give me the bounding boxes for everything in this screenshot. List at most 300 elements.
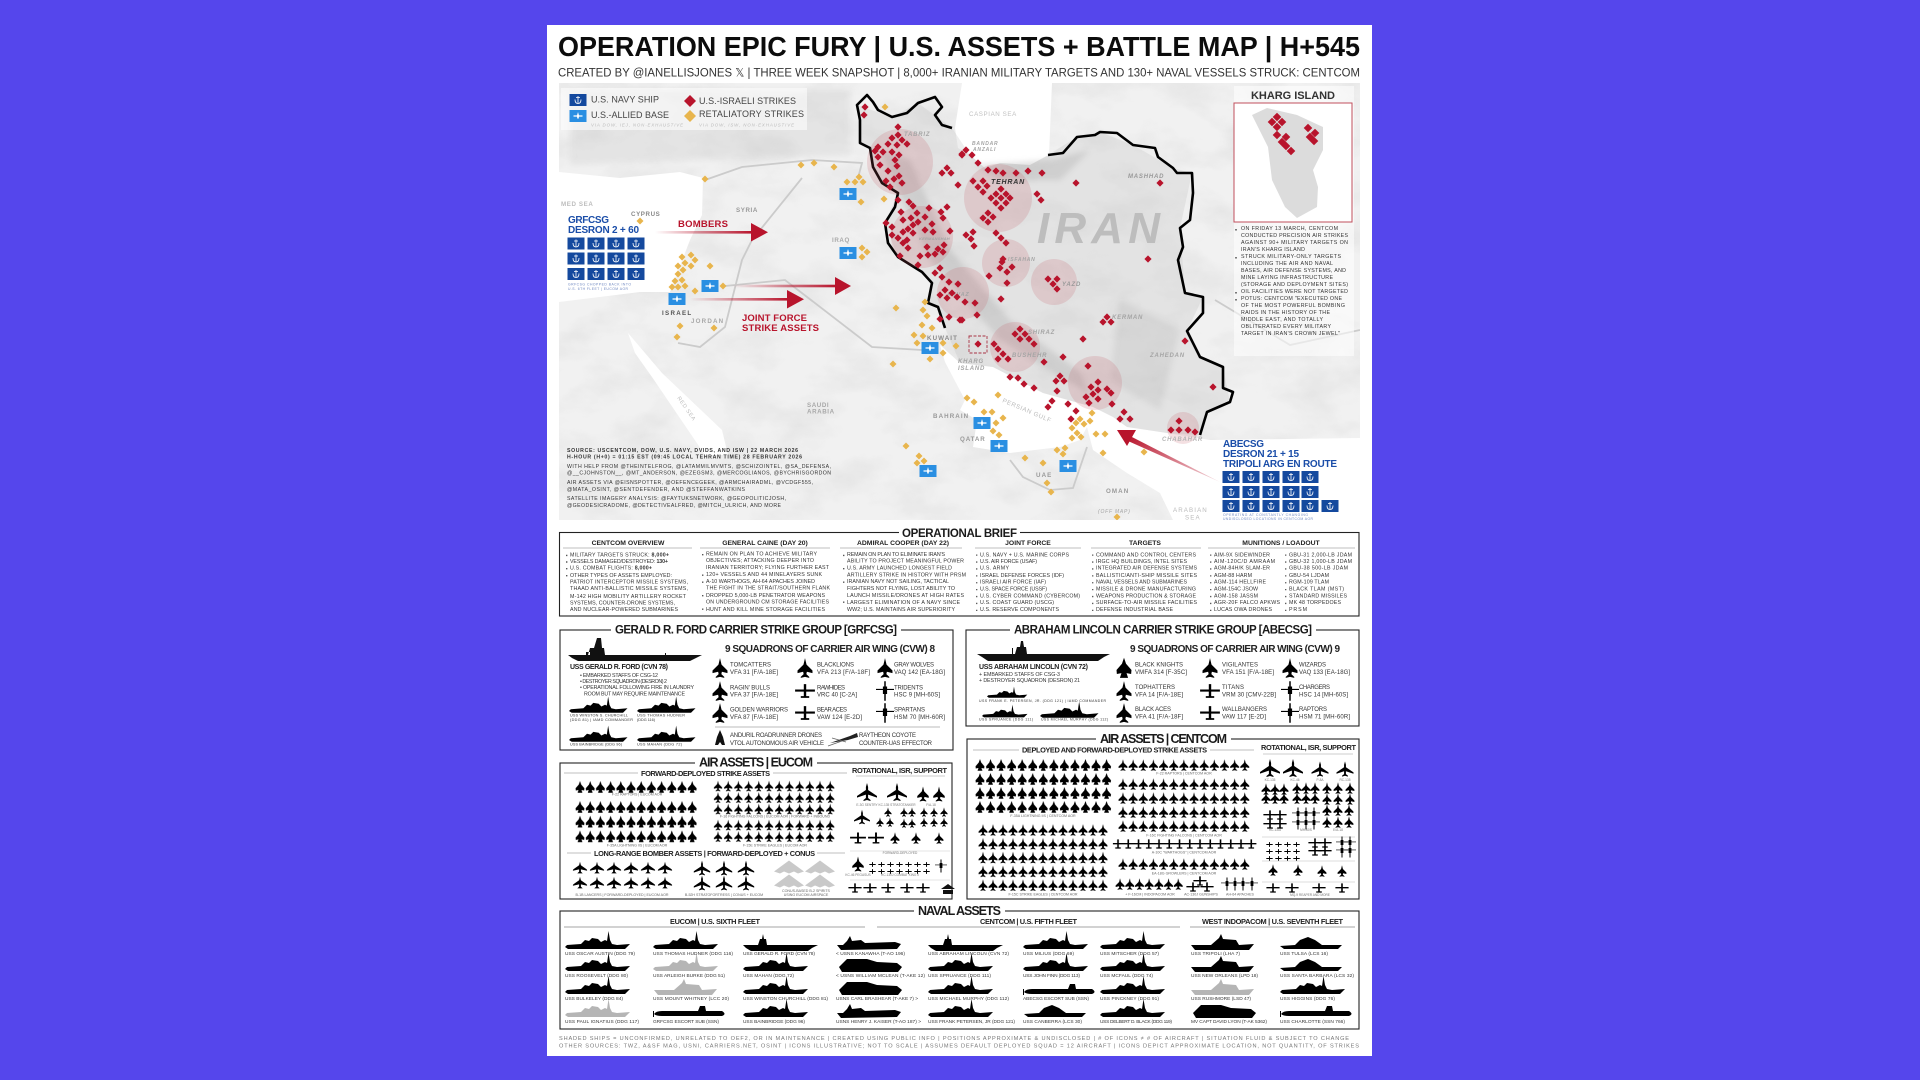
map place labels: TEHRAN (991, 179, 1025, 186)
ABECSG fleet marker: TRIPOLI ARG EN ROUTE (1223, 459, 1337, 470)
fleet: CENTCOM fifth fleet ships: ABECSG ESCORT SUB (SSN) (1023, 996, 1089, 1002)
rotational, ISR, support icons: HC-130J (1269, 828, 1282, 832)
map place labels: KERMAN (1112, 315, 1143, 321)
map place labels: ZAHEDAN (1149, 353, 1185, 359)
map place labels: BAHRAIN (933, 413, 969, 420)
squadrons of CVW-8: SPARTANS (894, 707, 925, 713)
legend: U.S. NAVY SHIP (591, 95, 659, 105)
fleet: West Indopacom seventh fleet ships: USS CHARLOTTE (SSN 766) (1280, 1019, 1345, 1025)
squadrons of CVW-9: VIGILANTES (1222, 663, 1258, 669)
Kharg strike notes: OF THE MOST POWERFUL BOMBING (1241, 303, 1345, 309)
brief: Admiral Cooper: IRANIAN NAVY NOT SAILING, TACTICAL (847, 579, 949, 585)
ABECSG fleet marker: DESRON 21 + 15 (1223, 449, 1299, 460)
brief: targets: WEAPONS PRODUCTION & STORAGE (1096, 593, 1196, 599)
icons: escort destroyers: (DDG 81) | IAMD COMMANDER (570, 718, 633, 722)
arrow: joint force strike assets (690, 277, 851, 334)
bomber icons: USING EUCOM AIRSPACE (784, 893, 829, 897)
ABECSG fleet marker (1222, 439, 1338, 521)
fleet: CENTCOM fifth fleet ships: USS DELBERT D. BLACK (DDG 119) (1100, 1019, 1172, 1025)
panel: naval assets (560, 904, 1359, 1029)
panel: air assets EUCOM: AIR ASSETS | EUCOM (699, 756, 813, 770)
rotational, ISR, support icons (845, 766, 955, 894)
F-35A CENTCOM icons: F-35A LIGHTNING IIS | CENTCOM AOR (1010, 814, 1076, 818)
bomber icons (572, 860, 836, 897)
F-15C CENTCOM icons: F-15C STRIKE EAGLES | CENTCOM AOR (1008, 892, 1078, 896)
map place labels: CHABAHAR (1162, 437, 1203, 443)
fleet: EUCOM sixth fleet ships: USS ROOSEVELT (DDG 80) (565, 973, 628, 979)
brief: munitions and loadout: MK 48 TORPEDOES (1289, 600, 1341, 606)
brief: General Caine: DROPPED 5,000-LB PENETRATOR WEAPONS (706, 593, 825, 599)
panel: Gerald R. Ford carrier strike group: • OPERATIONAL FOLLOWING FIRE IN LAUNDRY (580, 685, 694, 691)
panel: Abraham Lincoln carrier strike group: ABRAHAM LINCOLN CARRIER STRIKE GROUP [ABECSG] (1014, 624, 1312, 636)
fleet: CENTCOM fifth fleet ships (928, 931, 1172, 1025)
ABECSG fleet marker: ABECSG (1223, 439, 1264, 450)
Kharg strike notes: ON FRIDAY 13 MARCH, CENTCOM (1241, 226, 1338, 232)
brief: munitions and loadout: PRSM (1289, 607, 1307, 613)
squadrons of CVW-9: TITANS (1222, 685, 1244, 691)
brief: General Caine: OBJECTIVES; ATTACKING DEEPER INTO (706, 558, 814, 564)
GRFCSG fleet marker: GRFCSG CHOPPED BACK INTO (568, 282, 631, 286)
brief: targets (1096, 540, 1197, 613)
brief: targets: NAVAL VESSELS AND SUBMARINES (1096, 580, 1187, 586)
icons: escort destroyers: USS MAHAN (DDG 72) (637, 742, 683, 746)
brief: joint force: U.S. AIR FORCE (USAF) (980, 559, 1037, 565)
F-15C CENTCOM icons (978, 823, 1108, 896)
squadrons of CVW-9: WALLBANGERS (1222, 707, 1267, 713)
GRFCSG fleet marker (568, 215, 644, 291)
source notes: @MATA_OSINT, @SENTDEFENDER, AND @STEFFANWATKINS (567, 487, 746, 493)
rotational, ISR, support icons: P-8A (1316, 778, 1324, 782)
legend: U.S.-ISRAELI STRIKES (699, 96, 796, 106)
brief: targets: DEFENSE INDUSTRIAL BASE (1096, 607, 1173, 613)
fleet: CENTCOM fifth fleet ships: USS FRANK PETERSEN, JR (DDG 121) (928, 1019, 1015, 1025)
map place labels: IRAN (1037, 204, 1161, 253)
drones and counter-UAS: COUNTER-UAS EFFECTOR (859, 741, 933, 747)
centre column strike icons: AH-64 APACHES (1226, 892, 1255, 896)
squadrons of CVW-8: RAWHIDES (817, 685, 845, 691)
fleet: CENTCOM fifth fleet ships: USS MCFAUL (DDG 74) (1100, 973, 1153, 979)
ABECSG fleet marker: OPERATING AT CONSTANTLY CHANGING (1223, 513, 1308, 517)
F-22 and F-35 EUCOM icons (575, 780, 697, 848)
panel: battle map (559, 83, 1360, 522)
arrow: bombers: BOMBERS (678, 219, 728, 230)
retaliatory strikes markers (640, 107, 1144, 517)
centre column strike icons: AC-130J GUNSHIPS (1184, 892, 1218, 896)
panel: air assets CENTCOM: DEPLOYED AND FORWARD-DEPLOYED STRIKE ASSETS (1022, 746, 1207, 754)
squadrons of CVW-9: VFA 41 [F/A-18F] (1135, 714, 1183, 720)
squadrons of CVW-8: VFA 87 [F/A-18E] (730, 715, 778, 721)
squadrons of CVW-8: TOMCATTERS (730, 663, 771, 669)
rotational, ISR, support icons: RC-135 (1340, 778, 1351, 782)
squadrons of CVW-9 (1117, 658, 1350, 723)
F-16 and F-15E EUCOM icons (713, 780, 835, 848)
Kharg strike notes: INCLUDING THE AIR AND NAVAL (1241, 261, 1333, 267)
fleet: EUCOM sixth fleet ships: GRFCSG ESCORT SUB (SSN) (653, 1019, 719, 1025)
fleet: EUCOM sixth fleet ships: < USNS WILLIAM MCLEAN (T-AKE 12) (836, 973, 925, 979)
squadrons of CVW-8: VRC 40 [C-2A] (817, 693, 857, 699)
fleet: EUCOM sixth fleet ships: USS BAINBRIDGE (DDG 96) (743, 1019, 805, 1025)
map place labels: SEA (1185, 514, 1201, 522)
squadrons of CVW-8: VFA 213 [F/A-18F] (817, 670, 870, 676)
brief: CENTCOM overview: VESSELS DAMAGED/DESTROYED: 130+ (570, 559, 668, 565)
title: OPERATION EPIC FURY | U.S. ASSETS + BATTLE MAP | H+545 (558, 31, 1360, 62)
squadrons of CVW-8: TRIDENTS (894, 685, 923, 691)
source notes: AIR ASSETS VIA @EISNSPOTTER, @OEFENCEGEEK, @ARMCHAIRADML, @VCDGF555, (567, 480, 813, 486)
brief: targets: IRGC HQ BUILDINGS, INTEL SITES (1096, 559, 1187, 565)
brief: munitions and loadout: AIM-120C/D AMRAAM (1214, 559, 1275, 565)
rotational, ISR, support icons: HC-130J COMBAT KING II (881, 873, 919, 877)
brief: CENTCOM overview: AND NUCLEAR-POWERED SUBMARINES (570, 607, 678, 613)
centre column strike icons: + F-16CM | INDOPACOM AOR (1125, 892, 1175, 896)
fleet: EUCOM sixth fleet ships: USS WINSTON CHURCHILL (DDG 81) (743, 996, 828, 1002)
fleet: EUCOM sixth fleet ships: USS PAUL IGNATIUS (DDG 117) (565, 1019, 639, 1025)
Kharg strike notes: POTUS: CENTCOM "EXECUTED ONE (1241, 296, 1342, 302)
squadrons of CVW-9: VAW 117 [E-2D] (1222, 714, 1266, 720)
panel: naval assets: NAVAL ASSETS (918, 904, 1001, 918)
Kharg locator box (969, 336, 987, 353)
brief: General Caine: THE FIGHT IN THE STRAIT/SOUTHERN FLANK (706, 586, 830, 592)
icons: escort destroyers: (DDG 116) (637, 718, 656, 722)
fleet: West Indopacom seventh fleet ships: USS HIGGINS (DDG 76) (1280, 996, 1335, 1002)
brief: targets: TARGETS (1129, 540, 1161, 547)
Kharg strike notes: CONDUCTED PRECISION AIR STRIKES (1241, 233, 1348, 239)
map place labels: MED SEA (561, 201, 593, 208)
Kharg Island inset (1234, 86, 1354, 356)
brief: munitions and loadout: AGM-114 HELLFIRE (1214, 580, 1266, 586)
map place labels: OMAN (1106, 488, 1129, 495)
bomber icons: B-52H STRATOFORTRESS | CONUS + EUCOM (685, 893, 763, 897)
arrow: joint force strike assets: STRIKE ASSETS (742, 323, 819, 334)
map place labels: CYPRUS (631, 211, 660, 218)
centre column strike icons (1113, 758, 1258, 896)
brief: CENTCOM overview (570, 540, 688, 613)
brief: joint force: U.S. RESERVE COMPONENTS (980, 607, 1059, 613)
arrow: joint force strike assets: JOINT FORCE (742, 313, 807, 324)
fleet: EUCOM sixth fleet ships: USS ARLEIGH BURKE (DDG 51) (653, 973, 725, 979)
brief: Admiral Cooper: LARGEST ELIMINATION OF A NAVY SINCE (847, 600, 960, 606)
map place labels: ARABIA (807, 408, 835, 416)
rotational, ISR, support icons (1260, 743, 1356, 897)
icons: escort destroyers (979, 687, 1108, 722)
brief: General Caine: REMAIN ON PLAN TO ACHIEVE MILITARY (706, 552, 817, 558)
drones and counter-UAS: ANDURIL ROADRUNNER DRONES (730, 733, 822, 739)
brief: munitions and loadout: AIM-9X SIDEWINDER (1214, 552, 1270, 558)
brief: munitions and loadout: MUNITIONS / LOADOUT (1242, 540, 1321, 547)
fleet: West Indopacom seventh fleet ships: USS RUSHMORE (LSD 47) (1191, 996, 1251, 1002)
icon: USS Abraham Lincoln carrier (977, 641, 1110, 661)
icons: escort destroyers: USS THOMAS HUDNER (637, 714, 685, 718)
brief: joint force: ISRAELI AIR FORCE (IAF) (980, 580, 1046, 586)
fleet: West Indopacom seventh fleet ships: MV CAPT DAVID LYON (T-AK 5362) (1191, 1019, 1267, 1025)
map place labels: (OFF MAP) (1098, 509, 1131, 515)
F-35A CENTCOM icons (975, 758, 1112, 818)
squadrons of CVW-9: HSM 71 [MH-60R] (1299, 714, 1350, 720)
centre column strike icons: EA-18G GROWLERS | CENTCOM AOR (1152, 872, 1217, 876)
rotational, ISR, support icons: KC-46 (1290, 778, 1300, 782)
Kharg Island inset: KHARG ISLAND (1251, 90, 1335, 102)
brief: munitions and loadout: GBU-32 1,000-LB JDAM (1289, 559, 1352, 565)
footer notes: OTHER SOURCES: TWZ, A&SF MAG, USNI, CARRIERS.NET, OSINT | ICONS ILLUSTRATIVE; NOT TO SCALE | ASSUMES DEFAULT DEPLOYED SQUAD = 12 AIRCRAFT | ICONS DEPICT APPROXIMATE LOCATION, NOT QUANTITY, OF STRIKES (559, 1044, 1359, 1050)
rotational, ISR, support icons: F/A-18 (926, 803, 936, 807)
brief: CENTCOM overview: U.S. COMBAT FLIGHTS: 8,000+ (570, 566, 652, 572)
rotational, ISR, support icons: E-3G SENTRY (856, 803, 878, 807)
fleet: West Indopacom seventh fleet ships: USS TULSA (LCS 16) (1280, 951, 1328, 957)
squadrons of CVW-9: VAQ 133 [EA-18G] (1299, 670, 1350, 676)
panel: naval assets: CENTCOM | U.S. FIFTH FLEET (980, 917, 1077, 926)
panel: Gerald R. Ford carrier strike group: 9 SQUADRONS OF CARRIER AIR WING (CVW) 8 (725, 644, 935, 655)
squadrons of CVW-8: VAW 124 [E-2D] (817, 715, 862, 721)
squadrons of CVW-9: VRM 30 [CMV-22B] (1222, 692, 1276, 698)
F-22 and F-35 EUCOM icons: F-22 RAPTORS | EUCOM AOR (612, 792, 663, 796)
brief: Admiral Cooper (847, 540, 966, 613)
source notes: SATELLITE IMAGERY ANALYSIS: @FAYTUKSNETWORK, @GEOPOLITICJOSH, (567, 496, 786, 502)
drones and counter-UAS (715, 730, 933, 747)
footer notes: SHADED SHIPS = UNCONFIRMED, UNRELATED TO OEF2, OR IN MAINTENANCE | CREATED USING PUBLIC INFO | POSITIONS APPROXIMATE & UNDISCLOSED | # OF ICONS ≠ # OF AIRCRAFT | SITUATION FLUID & SUBJECT TO CHANGE (559, 1036, 1349, 1042)
map place labels: JORDAN (691, 318, 724, 325)
panel: air assets EUCOM: FORWARD-DEPLOYED STRIKE ASSETS (641, 769, 770, 778)
Kharg strike notes: MIDDLE EAST, AND TOTALLY (1241, 317, 1323, 323)
map place labels: YAZD (1062, 282, 1081, 288)
Kharg strike notes: BASES, AIR DEFENSE SYSTEMS, AND (1241, 268, 1346, 274)
legend: VIA DOW, IEJ, NON-EXHAUSTIVE (591, 122, 683, 128)
fleet: EUCOM sixth fleet ships: USS MAHAN (DDG 72) (743, 973, 794, 979)
Kharg strike notes: OIL FACILITIES WERE NOT TARGETED (1241, 289, 1348, 295)
brief: joint force: U.S. COAST GUARD (USCG) (980, 600, 1054, 606)
panel: Gerald R. Ford carrier strike group: USS GERALD R. FORD (CVN 78) (570, 664, 668, 671)
map place labels: KHARG (958, 359, 984, 365)
squadrons of CVW-9: VFA 14 [F/A-18E] (1135, 692, 1183, 698)
panel: naval assets: WEST INDOPACOM | U.S. SEVENTH FLEET (1202, 917, 1343, 926)
legend (561, 88, 807, 130)
map place labels: SHIRAZ (1028, 330, 1055, 336)
poster sheet (547, 25, 1372, 1056)
squadrons of CVW-9: BLACK ACES (1135, 707, 1171, 713)
brief: Admiral Cooper: LAUNCH MISSILE/DRONES AT HIGH RATES (847, 593, 964, 599)
bomber icons: B-1B LANCERS | FORWARD-DEPLOYED | EUCOM AOR (576, 893, 669, 897)
squadrons of CVW-8: VFA 31 [F/A-18E] (730, 670, 778, 676)
panel: operational brief (560, 526, 1359, 616)
squadrons of CVW-9: HSC 14 [MH-60S] (1299, 692, 1348, 698)
fleet: West Indopacom seventh fleet ships: USS TRIPOLI (LHA 7) (1191, 951, 1240, 957)
map place labels: ISLAND (958, 366, 985, 372)
map place labels: QATAR (960, 436, 986, 443)
map place labels: ISRAEL (662, 310, 692, 317)
fleet: CENTCOM fifth fleet ships: USS CANBERRA (LCS 30) (1023, 1019, 1082, 1025)
brief: munitions and loadout (1214, 540, 1352, 613)
brief: munitions and loadout: AGM-158 JASSM (1214, 593, 1258, 599)
squadrons of CVW-9: CHARGERS (1299, 685, 1330, 691)
panel: operational brief: OPERATIONAL BRIEF (902, 528, 1017, 540)
squadrons of CVW-8: VFA 37 [F/A-18E] (730, 693, 778, 699)
brief: targets: MISSILE & DRONE MANUFACTURING (1096, 586, 1196, 592)
fleet: EUCOM sixth fleet ships: USS THOMAS HUDNER (DDG 116) (653, 951, 733, 957)
Kharg strike notes: IRAN'S KHARG ISLAND (1241, 247, 1305, 253)
panel: air assets EUCOM (560, 756, 955, 899)
icons: escort destroyers (569, 697, 696, 746)
brief: Admiral Cooper: ABILITY TO PROJECT MEANINGFUL POWER (847, 558, 964, 564)
U.S.-Israeli strikes markers (864, 107, 1213, 432)
brief: munitions and loadout: BLACK TLAM (MST) (1289, 586, 1344, 592)
panel: Gerald R. Ford carrier strike group: • DESTROYER SQUADRON (DESRON) 2 (580, 679, 667, 685)
brief: targets: SURFACE-TO-AIR MISSILE FACILITIES (1096, 600, 1197, 606)
brief: munitions and loadout: GBU-54 LJDAM (1289, 573, 1329, 579)
strike density circles (867, 129, 1199, 444)
fleet: CENTCOM fifth fleet ships: USS PINCKNEY (DDG 91) (1100, 996, 1159, 1002)
rotational, ISR, support icons: E/A-18 (1333, 828, 1343, 832)
brief: CENTCOM overview: OTHER TYPES OF ASSETS EMPLOYED: (570, 573, 672, 579)
brief: targets: BALLISTIC/ANTI-SHIP MISSILE SITES (1096, 573, 1197, 579)
squadrons of CVW-8: BLACKLIONS (817, 663, 854, 669)
legend: RETALIATORY STRIKES (699, 109, 804, 119)
panel: Abraham Lincoln carrier strike group: + EMBARKED STAFFS OF CSG-3 (979, 672, 1060, 678)
fleet: EUCOM sixth fleet ships: USNS HENRY J. KAISER (T-AO 187) > (836, 1019, 921, 1025)
brief: joint force: U.S. NAVY + U.S. MARINE CORPS (980, 552, 1069, 558)
F-16 and F-15E EUCOM icons: F-15E STRIKE EAGLES | EUCOM AOR (743, 844, 807, 848)
Iran border (857, 95, 1233, 435)
rotational, ISR, support icons: KC-135 STRATOTANKER (878, 803, 916, 807)
brief: joint force: ISRAEL DEFENSE FORCES (IDF) (980, 573, 1064, 579)
panel: Abraham Lincoln carrier strike group (966, 624, 1359, 726)
panel: Abraham Lincoln carrier strike group: USS ABRAHAM LINCOLN (CVN 72) (979, 664, 1088, 671)
squadrons of CVW-9: RAPTORS (1299, 707, 1327, 713)
brief: Admiral Cooper: FIGHTERS NOT FLYING, LOST ABILITY TO (847, 586, 955, 592)
GRFCSG fleet marker: GRFCSG (568, 215, 609, 226)
brief: munitions and loadout: GBU-31 2,000-LB JDAM (1289, 552, 1352, 558)
brief: CENTCOM overview: THAAD ANTI-BALLISTIC MISSILE SYSTEMS, (570, 586, 688, 592)
arrow: bombers (655, 219, 768, 242)
arrow: ABECSG to strait (1117, 430, 1220, 482)
brief: munitions and loadout: LUCAS OWA DRONES (1214, 607, 1272, 613)
centre column strike icons: A-10C "WARTHOGS" | CENTCOM AOR (1152, 850, 1217, 854)
map place labels: SYRIA (736, 207, 758, 214)
source notes (567, 448, 831, 509)
panel: air assets CENTCOM: AIR ASSETS | CENTCOM (1100, 732, 1227, 746)
map place labels: UAE (1036, 472, 1052, 479)
map place labels: MASHHAD (1128, 174, 1164, 180)
subtitle: CREATED BY @IANELLISJONES 𝕏 | THREE WEEK SNAPSHOT | 8,000+ IRANIAN MILITARY TARGETS AND 130+ NAVAL VESSELS STRUCK: CENTCOM (558, 68, 1360, 80)
fleet: CENTCOM fifth fleet ships: USS ABRAHAM LINCOLN (CVN 72) (928, 951, 1009, 957)
brief: munitions and loadout: RGM-109 TLAM (1289, 580, 1329, 586)
brief: targets: INTEGRATED AIR DEFENSE SYSTEMS (1096, 566, 1197, 572)
brief: CENTCOM overview: CENTCOM OVERVIEW (592, 540, 665, 547)
Iran territory (857, 103, 1230, 435)
icons: escort destroyers: USS MICHAEL MURPHY (DDG 112) (1041, 718, 1108, 722)
source notes: @GEODESICRADOME, @DETECTIVEALFRED, @MITCH_ULRICH, AND MORE (567, 503, 782, 509)
map place labels: BANDAR (972, 141, 998, 147)
ABECSG fleet marker: UNDISCLOSED LOCATIONS IN CENTCOM AOR (1223, 517, 1314, 521)
F-22 and F-35 EUCOM icons: F-35A LIGHTNING IIS | EUCOM AOR (607, 844, 668, 848)
map place labels: TABRIZ (904, 132, 930, 138)
squadrons of CVW-9: TOPHATTERS (1135, 685, 1175, 691)
Kharg strike notes: OBLITERATED EVERY MILITARY (1241, 324, 1331, 330)
brief: munitions and loadout: GBU-38 500-LB JDAM (1289, 566, 1348, 572)
source notes: H-HOUR (H+0) = 01:15 EST (09:45 LOCAL TEHRAN TIME) 28 FEBRUARY 2026 (567, 454, 802, 460)
map place labels: ANZALI (972, 147, 996, 153)
map place labels: ARABIAN (1173, 507, 1208, 514)
footer notes (559, 1036, 1359, 1050)
bomber icons: CONUS-BASED B-2 SPIRITS (782, 889, 831, 893)
centre column strike icons: F-22 RAPTORS | CENTCOM AOR (1156, 772, 1212, 776)
brief: munitions and loadout: STANDARD MISSILES (1289, 593, 1347, 599)
brief: Admiral Cooper: WW2; U.S. MAINTAINS AIR SUPERIORITY (847, 607, 955, 613)
squadrons of CVW-9: BLACK KNIGHTS (1135, 663, 1183, 669)
squadrons of CVW-9: VFA 151 [F/A-18E] (1222, 670, 1274, 676)
brief: munitions and loadout: AGM-154C JSOW (1214, 586, 1258, 592)
icons: escort destroyers: USS WINSTON S. CHURCHILL (570, 714, 628, 718)
squadrons of CVW-9: WIZARDS (1299, 663, 1326, 669)
brief: Admiral Cooper: ADMIRAL COOPER (DAY 22) (857, 540, 949, 547)
source notes: SOURCE: USCENTCOM, DOW, U.S. NAVY, DVIDS, AND ISW | 22 MARCH 2026 (567, 448, 798, 454)
rotational, ISR, support icons: FORWARD-DEPLOYED (883, 851, 918, 855)
brief: joint force: U.S. CYBER COMMAND (CYBERCOM) (980, 593, 1080, 599)
squadrons of CVW-8 (713, 658, 945, 723)
Kharg strike notes: (STORAGE AND DEPLOYMENT SITES) (1241, 282, 1348, 288)
centre column strike icons: F-16C FIGHTING FALCONS | CENTCOM AOR (1146, 834, 1222, 838)
allied base icons (668, 188, 1076, 477)
brief: joint force (980, 540, 1080, 613)
squadrons of CVW-8: RAGIN' BULLS (730, 685, 770, 691)
brief: targets: COMMAND AND CONTROL CENTERS (1096, 552, 1196, 558)
fleet: West Indopacom seventh fleet ships: USS NEW ORLEANS (LPD 18) (1191, 973, 1258, 979)
Kharg strike notes: MINE LAYING INFRASTRUCTURE (1241, 275, 1333, 281)
icon: USS Gerald R. Ford carrier (568, 638, 702, 661)
squadrons of CVW-8: BEAR ACES (817, 707, 847, 713)
Kharg strike notes: STRUCK MILITARY-ONLY TARGETS (1241, 254, 1341, 260)
map place labels: AHVAZ (946, 292, 970, 298)
brief: General Caine: GENERAL CAINE (DAY 20) (722, 540, 808, 547)
brief: CENTCOM overview: PATRIOT INTERCEPTOR MISSILE SYSTEMS, (570, 580, 688, 586)
F-16 and F-15E EUCOM icons: F-16 FIGHTING FALCONS | EUCOM AOR | FORWARD + INBOUND (720, 814, 830, 818)
map place labels: ISFAHAN (1008, 257, 1036, 263)
fleet: CENTCOM fifth fleet ships: USS JOHN FINN (DDG 113) (1023, 973, 1080, 979)
brief: munitions and loadout: AGM-88 HARM (1214, 573, 1252, 579)
rotational, ISR, support icons: ROTATIONAL, ISR, SUPPORT (1261, 743, 1356, 752)
map place labels: IRAQ (832, 237, 850, 244)
source notes: WITH HELP FROM @THEINTELFROG, @LATAMMILMVMTS, @SCHIZOINTEL, @SA_DEFENSA, (567, 464, 831, 470)
legend: U.S.-ALLIED BASE (591, 110, 669, 120)
Kharg strike notes: AGAINST 90+ MILITARY TARGETS ON (1241, 240, 1348, 246)
brief: General Caine (706, 540, 830, 613)
panel: Gerald R. Ford carrier strike group (560, 624, 953, 750)
brief: General Caine: ON UNDERGROUND CM STORAGE FACILITIES (706, 600, 829, 606)
brief: CENTCOM overview: SYSTEMS, COUNTER-DRONE SYSTEMS, (570, 600, 675, 606)
map place labels: KUWAIT (927, 335, 958, 342)
map place labels: KERMANSHAH (919, 236, 950, 241)
fleet: West Indopacom seventh fleet ships: USS SANTA BARBARA (LCS 32) (1280, 973, 1354, 979)
fleet: EUCOM sixth fleet ships: USS BULKELEY (DDG 84) (565, 996, 623, 1002)
icons: escort destroyers: USS FRANK E. PETERSEN, JR. (DDG 121) | IAMD COMMANDER (979, 699, 1106, 703)
brief: General Caine: 120+ VESSELS AND 44 MINELAYERS SUNK (706, 572, 822, 578)
brief: munitions and loadout: AGR-20F FALCO APKWS (1214, 600, 1280, 606)
fleet: CENTCOM fifth fleet ships: USS MICHAEL MURPHY (DDG 112) (928, 996, 1009, 1002)
fleet: EUCOM sixth fleet ships: < USNS KANAWHA (T-AO 196) (836, 951, 905, 957)
brief: joint force: JOINT FORCE (1005, 540, 1051, 547)
drones and counter-UAS: VTOL AUTONOMOUS AIR VEHICLE (730, 741, 824, 747)
drones and counter-UAS: RAYTHEON COYOTE (859, 733, 916, 739)
fleet: CENTCOM fifth fleet ships: USS MILIUS (DDG 69) (1023, 951, 1074, 957)
brief: General Caine: IRANIAN TERRITORY; FLYING FURTHER EAST (706, 565, 830, 571)
GRFCSG fleet marker: DESRON 2 + 60 (568, 225, 639, 236)
rotational, ISR, support icons: KC-46 PEGASUS (845, 873, 871, 877)
rotational, ISR, support icons: ROTATIONAL, ISR, SUPPORT (852, 766, 947, 775)
rotational, ISR, support icons: KC-135 (1265, 778, 1276, 782)
fleet: EUCOM sixth fleet ships: USNS CARL BRASHEAR (T-AKE 7) > (836, 996, 918, 1002)
fleet: EUCOM sixth fleet ships (565, 931, 925, 1025)
brief: joint force: U.S. ARMY (980, 566, 1009, 572)
legend: VIA DOW, ISW, NON-EXHAUSTIVE (699, 122, 794, 128)
squadrons of CVW-8: GOLDEN WARRIORS (730, 707, 788, 713)
brief: joint force: U.S. SPACE FORCE (USSF) (980, 586, 1047, 592)
